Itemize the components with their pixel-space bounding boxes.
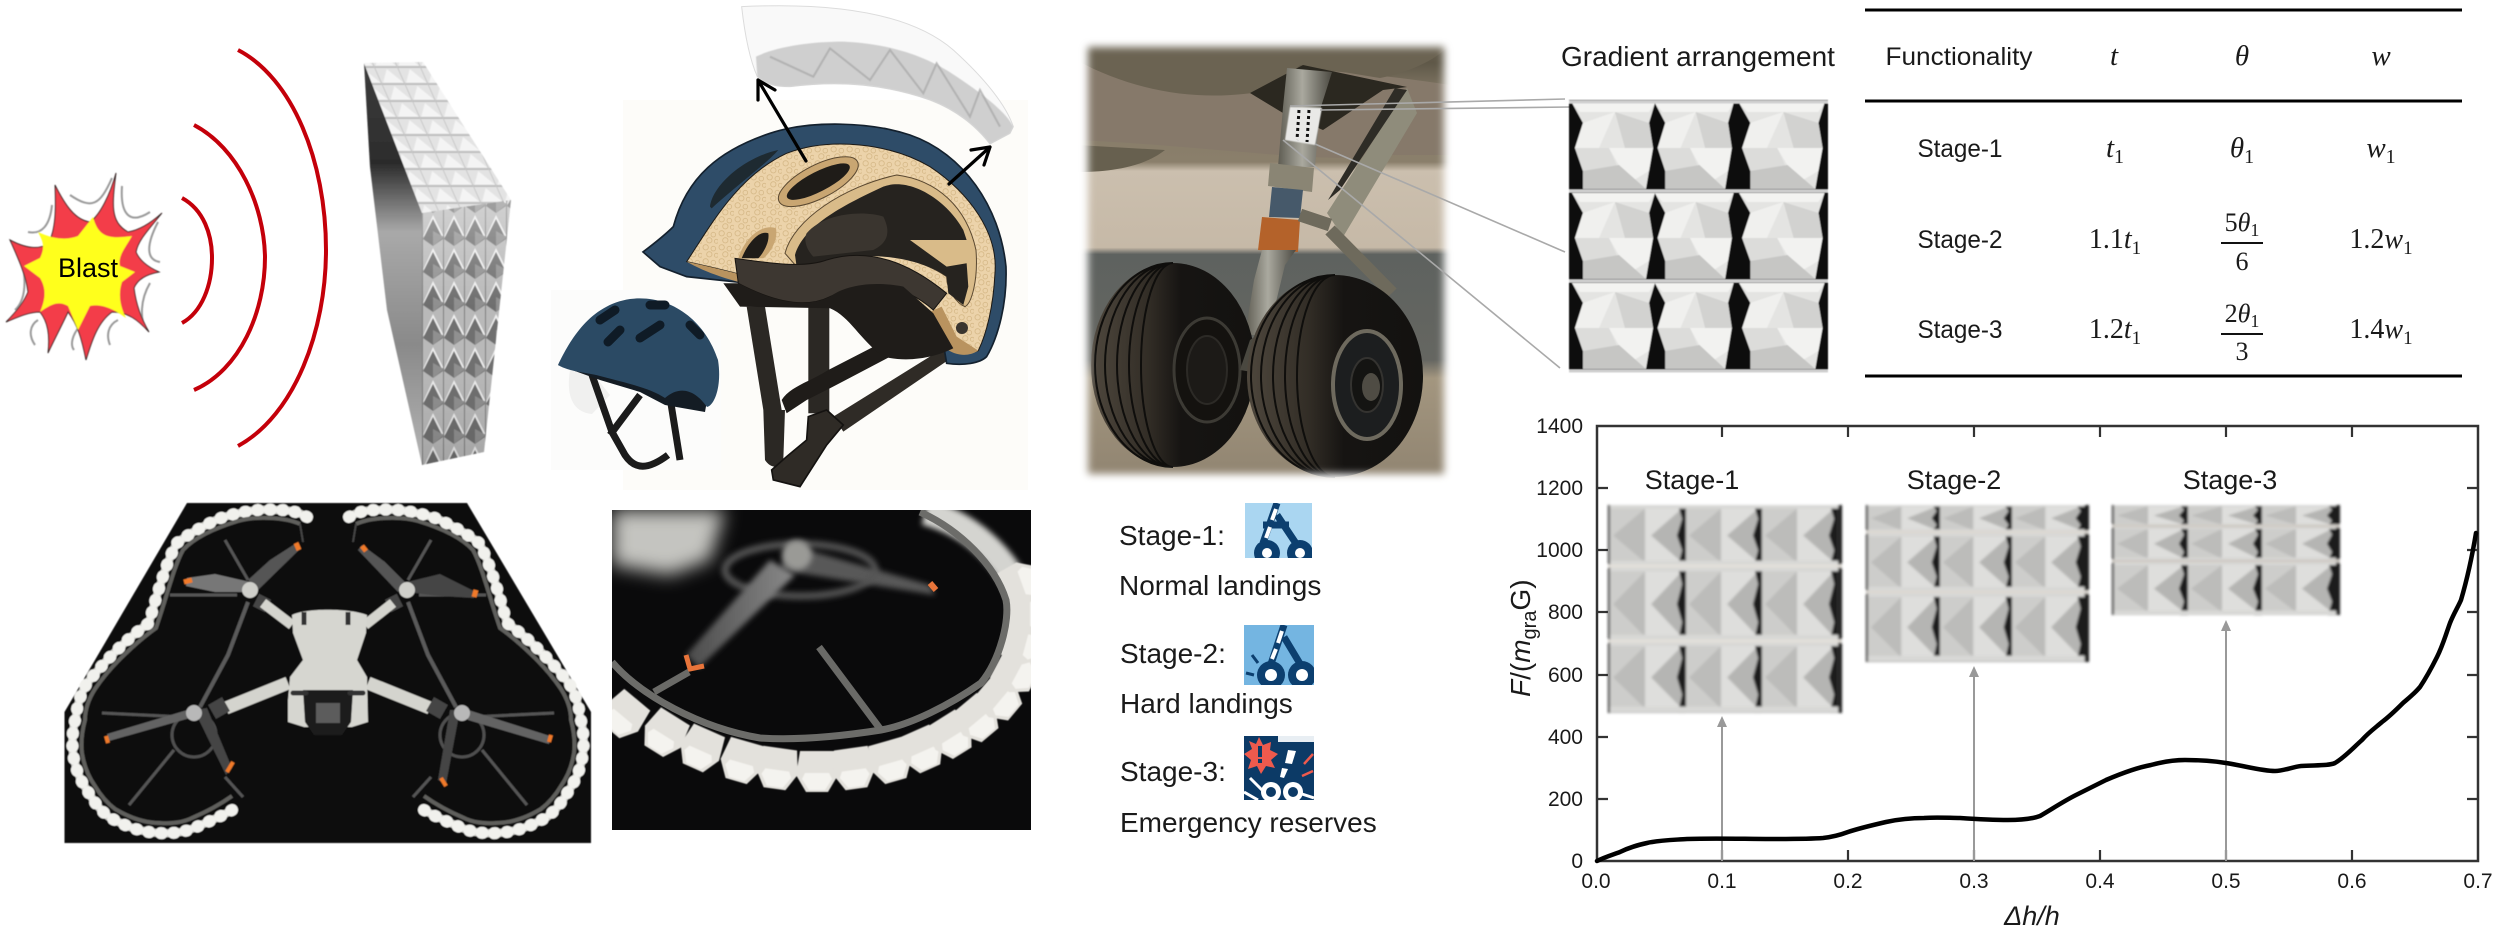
stage-2 row: Stage-2: [1918, 226, 2002, 254]
landing stage legend: [1119, 503, 1377, 838]
top face: [364, 62, 511, 213]
separators: [1569, 102, 1828, 371]
icon: hard landing: [1244, 625, 1314, 685]
stage-2 row: 1.1t: [2089, 224, 2132, 255]
y axis title: G): [1505, 579, 1536, 611]
stage-3 row: 1: [2132, 328, 2141, 349]
origami sandwich panel: [364, 62, 511, 465]
stage-2 row: 6: [2236, 247, 2248, 276]
background: [1076, 36, 1456, 486]
foam liner: [687, 144, 995, 353]
orange band: [1258, 217, 1300, 252]
front left propeller: [106, 705, 233, 775]
stage-3 label: Stage-3:: [1120, 756, 1226, 787]
heading: gradient arrangement: Gradient arrangement: [1561, 41, 1835, 72]
small helmet photo: [551, 290, 721, 470]
ring close-up photo: [595, 510, 1050, 830]
gray shock marks around the burst: [15, 178, 160, 350]
side face: [364, 63, 422, 465]
propeller blade: [686, 560, 795, 668]
arrows from helmet liner to shell: [758, 80, 990, 184]
x axis title: Δh/h: [2003, 901, 2060, 931]
y axis labels: [1536, 415, 1583, 873]
red star: [6, 173, 162, 360]
lower cradle: [723, 283, 953, 359]
front face: [422, 200, 511, 465]
stage-2 row: [1918, 208, 2413, 276]
normal landings text: Normal landings: [1119, 570, 1321, 601]
inset titles: Stage-2: [1907, 465, 2001, 495]
inset stage-2: [1866, 505, 2089, 662]
inset titles: Stage-3: [2183, 465, 2277, 495]
force displacement chart: [1505, 415, 2493, 931]
header row: [1886, 40, 2391, 72]
gray indicator arrows: [1717, 620, 2231, 861]
header row: θ: [2235, 40, 2249, 72]
y axis labels: 1000: [1536, 539, 1583, 562]
stage-1 row: 1: [2386, 146, 2396, 168]
diagonal brace: [1327, 88, 1417, 237]
collar: [1268, 163, 1314, 192]
padding band: [735, 255, 947, 310]
header row: Functionality: [1886, 43, 2033, 71]
drone photo: [64, 503, 591, 843]
rear propellers: [184, 542, 476, 598]
blurred ring top: [918, 510, 1024, 582]
x axis labels: 0.3: [1959, 870, 1989, 893]
header row: t: [2110, 40, 2119, 72]
stage-1 row: 1: [2114, 146, 2124, 168]
plot frame and ticks: [1597, 426, 2478, 861]
stage-2 row: 5θ: [2225, 208, 2250, 237]
ring track: [612, 512, 1007, 739]
stage-3 row: 2θ: [2225, 299, 2250, 328]
y axis title: gra: [1519, 610, 1541, 639]
x axis labels: 0.6: [2337, 870, 2367, 893]
stage-1 row: w: [2366, 132, 2386, 164]
left tire: [1091, 263, 1255, 467]
stage-3 row: 1: [2403, 328, 2413, 349]
blast wave arcs: [182, 50, 326, 446]
y axis labels: 400: [1548, 726, 1583, 749]
x axis labels: [1581, 870, 2493, 893]
shell vent: [710, 150, 778, 208]
axle: [1240, 338, 1254, 372]
vents: [600, 305, 700, 342]
shell: [558, 298, 719, 407]
outer shell: [643, 124, 1006, 364]
white origami shell insert: [742, 6, 1013, 144]
thin spokes: [654, 647, 881, 730]
origami block chain: [595, 557, 1050, 792]
gradient arrangement image: [1569, 100, 1828, 372]
header row: w: [2371, 40, 2391, 72]
row 2: [1572, 193, 1825, 279]
x axis labels: 0.2: [1833, 870, 1863, 893]
icon: normal landing: [1245, 503, 1312, 558]
blast starburst icon: [6, 173, 162, 360]
front right propeller: [438, 705, 551, 786]
y axis labels: 1200: [1536, 477, 1583, 500]
stage-3 row: [1918, 299, 2413, 366]
drone body: [288, 610, 368, 727]
stage-1 row: 1: [2244, 146, 2254, 168]
rivet: [956, 322, 968, 334]
stage-2 row: 1: [2250, 220, 2259, 240]
straps: [592, 375, 680, 466]
parameter table: [1865, 10, 2462, 376]
callout lines to gradient arrangement: [1283, 99, 1570, 368]
lower strut: [1245, 250, 1296, 335]
x axis labels: 0.1: [1707, 870, 1737, 893]
stage-2 row: 1.2w: [2349, 224, 2403, 255]
stage-1 row: Stage-1: [1918, 135, 2002, 163]
gimbal camera: [303, 690, 353, 735]
tan liner rim: [687, 262, 978, 355]
black backdrop: [64, 503, 591, 843]
inset origami on strut: [1285, 107, 1322, 145]
shell rim: [558, 360, 708, 412]
hard landings text: Hard landings: [1120, 688, 1293, 719]
right tire: [1247, 275, 1423, 477]
strut upper: [1278, 68, 1332, 167]
row 1: [1572, 103, 1825, 189]
response curve: [1597, 533, 2476, 861]
helmet cross section: [643, 124, 1006, 487]
inner cavity: [785, 175, 976, 307]
emergency reserves text: Emergency reserves: [1120, 807, 1377, 838]
inset titles: Stage-1: [1645, 465, 1739, 495]
x axis labels: 0.0: [1581, 870, 1611, 893]
x axis labels: 0.7: [2463, 870, 2493, 893]
y axis labels: 800: [1548, 601, 1583, 624]
front foam vent: [738, 227, 776, 258]
y axis labels: 600: [1548, 664, 1583, 687]
y axis labels: 1400: [1536, 415, 1583, 438]
yellow star: [24, 217, 135, 330]
protective ring with origami blocks: [72, 510, 584, 833]
inset stage-3: [2112, 505, 2340, 615]
y axis title: F/(m: [1505, 639, 1536, 697]
landing gear photo: [1076, 36, 1456, 486]
stage-2 label: Stage-2:: [1120, 638, 1226, 669]
x axis labels: 0.4: [2085, 870, 2115, 893]
y axis labels: 200: [1548, 788, 1583, 811]
stage-3 row: 1.2t: [2089, 314, 2132, 345]
visor: [569, 370, 610, 414]
x axis labels: 0.5: [2211, 870, 2241, 893]
row 3: [1572, 283, 1825, 369]
blurred drone parts: [612, 510, 725, 575]
top foam vent: [772, 147, 865, 216]
stage-1 row: θ: [2230, 132, 2244, 164]
stage-2 row: 1: [2403, 238, 2413, 259]
inset titles: [1645, 465, 2277, 495]
stage-1 row: [1918, 132, 2396, 168]
stage-2 row: 1: [2132, 238, 2141, 259]
stage-1 row: t: [2106, 132, 2115, 164]
icon: emergency landing: [1244, 736, 1314, 800]
y axis labels: 0: [1571, 850, 1583, 873]
stage-1 label: Stage-1:: [1119, 520, 1225, 551]
blast label: Blast: [58, 253, 119, 283]
folded core: [756, 42, 1013, 144]
fuselage belly: [1085, 65, 1443, 88]
rear arms: [256, 600, 400, 606]
stage-3 row: 1.4w: [2349, 314, 2403, 345]
front arms: [226, 683, 430, 708]
straps: [747, 307, 953, 487]
stage-3 row: Stage-3: [1918, 316, 2002, 344]
stage-3 row: 1: [2250, 311, 2259, 331]
inset stage-1: [1608, 505, 1842, 713]
blue strut section: [1269, 187, 1303, 218]
helmet background: [623, 100, 1028, 490]
stage-3 row: 3: [2236, 337, 2248, 366]
